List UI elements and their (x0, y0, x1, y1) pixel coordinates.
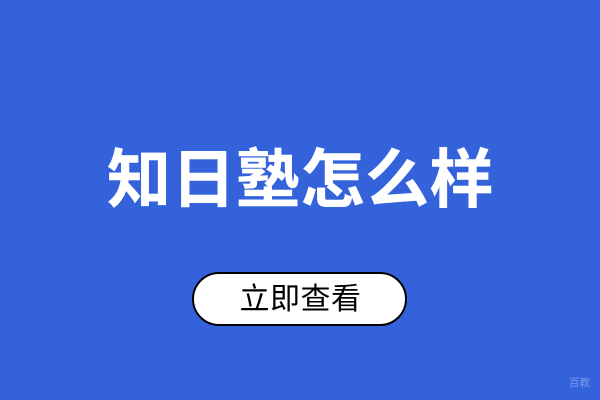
button: view now: 立即查看 (240, 283, 362, 316)
title: 知日塾怎么样 (107, 144, 494, 216)
button: view now (192, 272, 407, 326)
watermark: 百教 (569, 377, 590, 389)
